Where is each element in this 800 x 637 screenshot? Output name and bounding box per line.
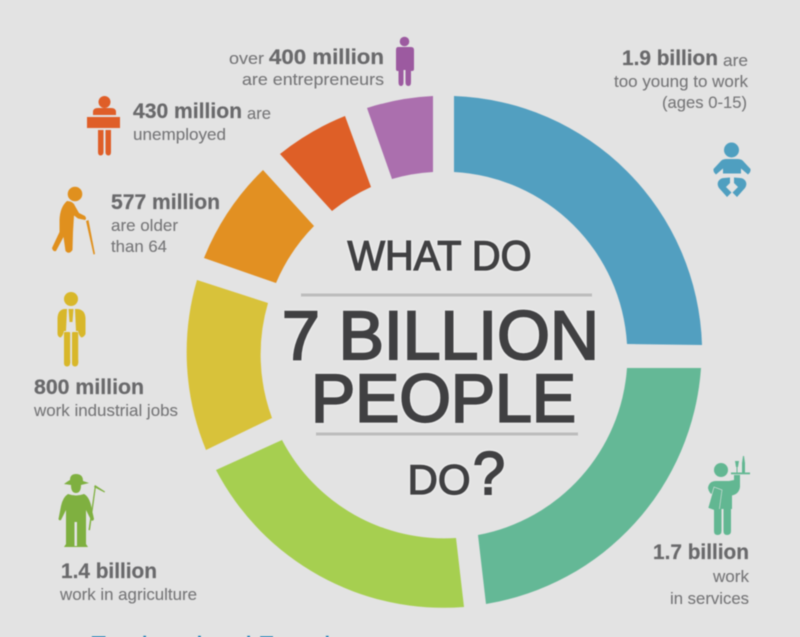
label: agriculture: 1.4 billion <box>61 560 157 583</box>
title line: do: DO <box>408 456 470 503</box>
label: unemployed <box>133 100 271 144</box>
title line: what do: WHAT DO <box>348 232 532 279</box>
label: unemployed: 430 million <box>133 100 242 123</box>
label: services: work <box>712 567 749 586</box>
title line: 7 billion: 7 BILLION <box>282 297 599 374</box>
label: services: 1.7 billion <box>653 541 749 564</box>
label: industrial jobs <box>33 376 178 420</box>
label: entrepreneurs: are entrepreneurs <box>242 70 384 89</box>
label: older than 64: 577 million <box>111 191 220 214</box>
label: too young to work: are <box>723 51 748 70</box>
label: too young to work: 1.9 billion <box>622 47 718 70</box>
segment: entrepreneurs <box>367 96 433 179</box>
segment: too young to work <box>454 96 702 345</box>
icon: baby <box>713 142 751 197</box>
label: agriculture: work in agriculture <box>59 585 197 604</box>
label: older than 64: than 64 <box>111 237 167 256</box>
label: services: in services <box>670 589 749 608</box>
label: industrial jobs: work industrial jobs <box>33 401 178 420</box>
icon: elderly person with cane <box>52 187 95 254</box>
label: services <box>653 541 749 608</box>
label: industrial jobs: 800 million <box>34 376 144 399</box>
label: too young to work: too young to work <box>614 72 748 91</box>
label: too young to work <box>614 47 748 112</box>
label: older than 64 <box>111 191 220 256</box>
label: unemployed: are <box>247 104 271 123</box>
segment: services <box>478 368 701 604</box>
icon: waiter with tray <box>708 456 750 535</box>
label: entrepreneurs: over <box>229 49 264 68</box>
icon: farmer with hoe <box>58 474 105 547</box>
title line: people: PEOPLE <box>311 360 576 436</box>
label: agriculture <box>59 560 197 604</box>
segment: unemployed <box>280 116 371 211</box>
icon: industrial worker <box>58 292 86 366</box>
label: entrepreneurs <box>229 46 384 89</box>
donut chart <box>187 96 702 608</box>
label: entrepreneurs: 400 million <box>269 46 384 69</box>
segment: older than 64 <box>204 170 314 283</box>
centre title <box>282 232 599 507</box>
label: older than 64: are older <box>111 216 178 235</box>
label: unemployed: unemployed <box>133 125 226 144</box>
segment: agriculture <box>216 440 464 608</box>
title question mark: ? <box>473 440 505 507</box>
segment: industrial jobs <box>187 280 272 450</box>
icon: entrepreneur <box>396 37 414 86</box>
label: too young to work: (ages 0-15) <box>662 93 747 112</box>
icon: unemployed person with sign <box>87 96 120 156</box>
